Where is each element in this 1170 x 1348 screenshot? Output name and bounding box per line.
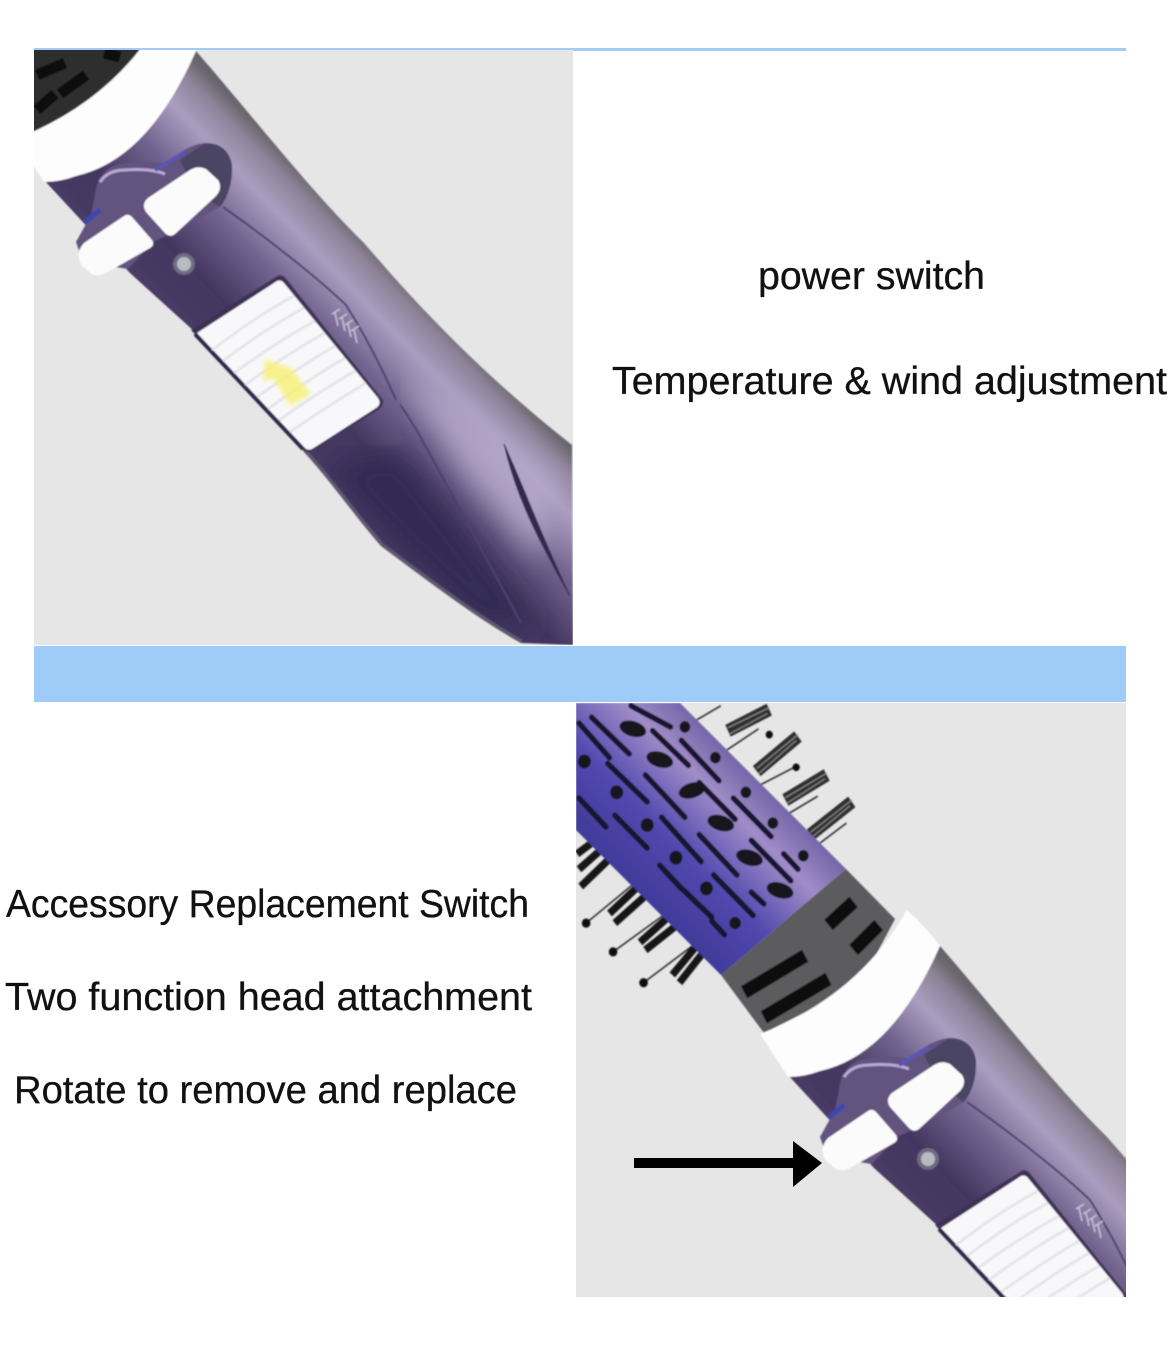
panel: power switch photo xyxy=(34,50,573,645)
divider band xyxy=(34,646,1126,702)
arrow: points to accessory switch xyxy=(634,1141,822,1187)
panel: accessory switch photo xyxy=(576,703,1126,1297)
label: accessory replacement switch: Accessory Replacement Switch xyxy=(6,883,529,926)
label: temperature and wind adjustment: Temperature & wind adjustment xyxy=(612,360,1167,403)
label: power switch: power switch xyxy=(758,255,985,298)
label: rotate to remove and replace: Rotate to remove and replace xyxy=(14,1069,517,1112)
label: two function head attachment: Two function head attachment xyxy=(5,976,532,1019)
top rule xyxy=(34,48,1126,51)
